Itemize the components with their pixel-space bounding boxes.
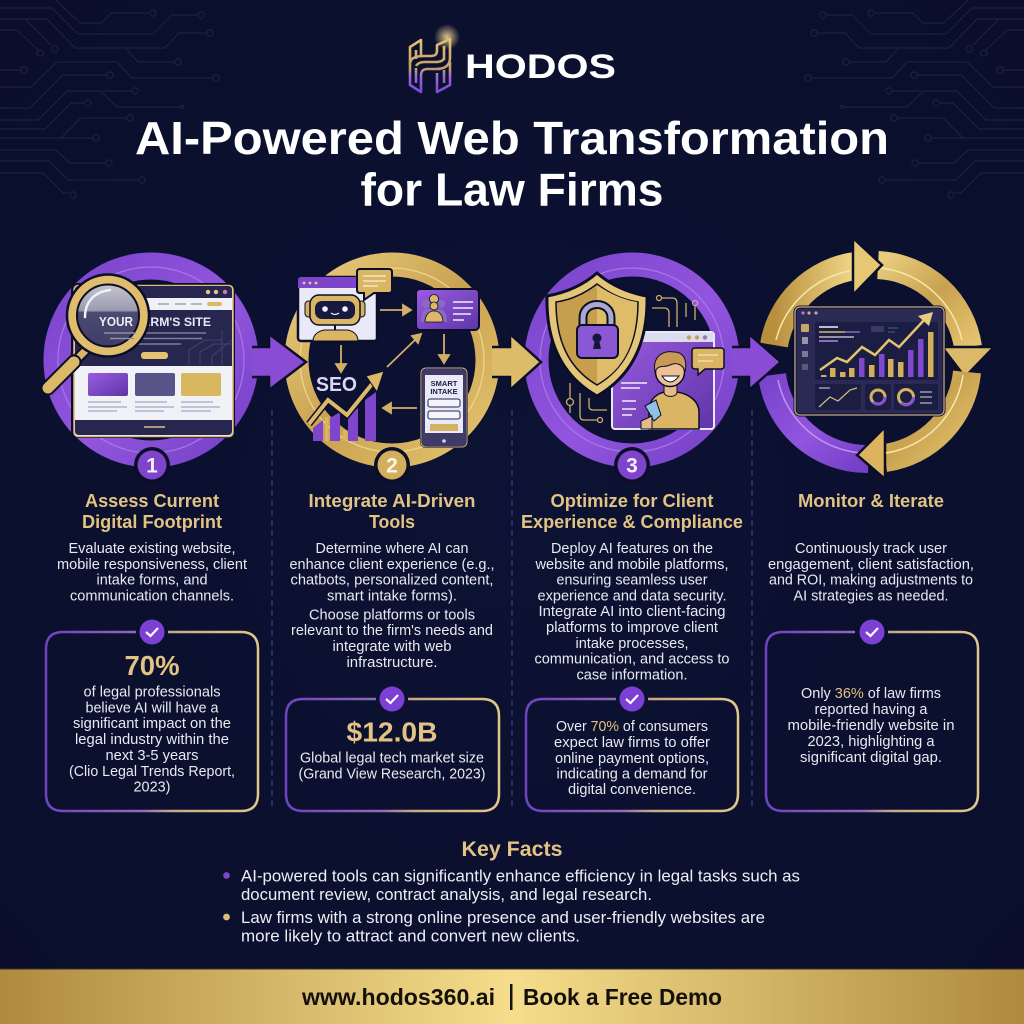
- dashed column dividers: [272, 410, 752, 806]
- column 3: description: communication, and access to: [534, 652, 730, 668]
- column 4: stat panel: Only 36% of law firms: [801, 686, 941, 702]
- icon: audience card: [416, 289, 479, 330]
- number badge 1: 1: [146, 454, 158, 478]
- column 4: description: [768, 541, 974, 604]
- step 3 illustration: security and client experience: [536, 264, 728, 456]
- arrow: step 1 to step 2: [252, 334, 306, 390]
- column 3: stat panel: digital convenience.: [568, 782, 696, 798]
- column 4: stat panel: mobile-friendly website in: [788, 718, 954, 734]
- column 2: heading: Integrate AI-Driven: [308, 491, 476, 511]
- column 1: heading: Digital Footprint: [82, 512, 222, 532]
- column 3: description: ensuring seamless user: [556, 573, 708, 589]
- icon: magnifying glass: [48, 274, 149, 388]
- key fact 2: Law firms with a strong online presence and user-friendly websites are: [241, 908, 765, 927]
- column 1: description: communication channels.: [70, 588, 234, 604]
- column 3: stat panel: Over 70% of consumers: [556, 719, 708, 735]
- arrow: step 3 to step 4: [732, 334, 781, 390]
- column 3: description: Deploy AI features on the: [551, 541, 713, 557]
- arrow: step 2 to step 3: [492, 334, 541, 390]
- column 1: heading: Assess Current: [85, 491, 219, 511]
- column 2: description: enhance client experience (e.g.,: [290, 557, 494, 573]
- column 3: description: experience and data security.: [538, 588, 726, 604]
- icon: SEO bar chart and rising arrow: [309, 371, 384, 441]
- column 3: description: Integrate AI into client-facing: [538, 604, 726, 620]
- column 2: stat panel: $12.0B: [346, 716, 438, 748]
- number badge 2: 2: [386, 454, 398, 478]
- title: for Law Firms: [360, 164, 664, 216]
- icon: website browser: [73, 285, 233, 436]
- column 1: stat panel: legal industry within the: [75, 732, 229, 748]
- column 2: stat panel: [286, 686, 499, 811]
- icon: SEO bar chart and rising arrow: SEO: [316, 374, 357, 396]
- column 1: stat panel: (Clio Legal Trends Report,: [69, 764, 235, 780]
- column 1: stat panel: 2023): [134, 780, 170, 796]
- column 4: stat panel: [766, 620, 978, 811]
- logo: HODOS: HODOS: [465, 48, 616, 86]
- column 3: stat panel: online payment options,: [555, 751, 709, 767]
- footer banner: www.hodos360.ai: [301, 984, 495, 1010]
- step 2 illustration: AI tools workflow: [296, 264, 488, 456]
- column 2: description: smart intake forms).: [327, 588, 457, 604]
- column 1: description: mobile responsiveness, client: [57, 557, 247, 573]
- column 2: description: relevant to the firm's needs and: [291, 623, 493, 639]
- column 1: stat panel: next 3-5 years: [106, 748, 198, 764]
- footer banner: Book a Free Demo: [523, 984, 722, 1010]
- icon: magnifying glass: YOUR: [99, 315, 133, 329]
- title: [135, 112, 889, 216]
- column 1: description: Evaluate existing website,: [68, 541, 236, 557]
- column 2: heading: [308, 491, 476, 532]
- column 4: description: AI strategies as needed.: [794, 588, 948, 604]
- column 1: description: [57, 541, 247, 604]
- column 4: stat panel: significant digital gap.: [800, 750, 942, 766]
- column 3: heading: Optimize for Client: [550, 491, 714, 511]
- footer banner: [0, 969, 1024, 1024]
- column 4: description: engagement, client satisfaction,: [768, 557, 974, 573]
- column 3: stat panel: indicating a demand for: [556, 766, 708, 782]
- column 4: stat panel: reported having a: [814, 702, 928, 718]
- column 4: stat panel: 2023, highlighting a: [808, 734, 935, 750]
- key fact 2: [223, 908, 765, 946]
- column 3: stat panel: expect law firms to offer: [554, 735, 710, 751]
- key fact 1: AI-powered tools can significantly enhance efficiency in legal tasks such as: [241, 866, 800, 886]
- column 3: description: [534, 541, 730, 683]
- column 1: description: intake forms, and: [96, 573, 208, 589]
- title: AI-Powered Web Transformation: [135, 112, 889, 164]
- column 1: stat panel: significant impact on the: [73, 716, 231, 732]
- column 1: stat panel: [46, 620, 258, 811]
- column 1: stat panel: of legal professionals: [84, 684, 220, 700]
- column 3: description: website and mobile platforms,: [535, 557, 728, 573]
- logo: HODOS: [410, 24, 616, 92]
- column 2: heading: Tools: [369, 512, 415, 532]
- key fact 2: more likely to attract and convert new clients.: [241, 926, 580, 946]
- number badge 3: [614, 447, 650, 483]
- workflow arrows: [336, 305, 449, 413]
- column 2: description: integrate with web: [332, 639, 452, 655]
- column 2: description: Choose platforms or tools: [309, 607, 475, 623]
- key facts heading: Key Facts: [462, 838, 562, 861]
- key fact 1: [223, 866, 800, 904]
- column 3: heading: [521, 491, 743, 532]
- number badge 2: [374, 447, 410, 483]
- key fact 1: document review, contract analysis, and legal research.: [241, 885, 652, 904]
- circuit traces: [566, 296, 698, 422]
- number badge 3: 3: [626, 454, 638, 478]
- column 3: heading: Experience & Compliance: [521, 512, 743, 532]
- column 1: heading: [82, 491, 222, 532]
- column 2: description: Determine where AI can: [316, 541, 468, 557]
- column 1: stat panel: believe AI will have a: [86, 700, 219, 716]
- icon: smart intake phone: INTAKE: [430, 387, 458, 396]
- column 4: description: Continuously track user: [795, 541, 947, 557]
- icon: smart intake phone: [421, 368, 467, 447]
- column 2: description: infrastructure.: [346, 655, 438, 671]
- column 2: description: chatbots, personalized content,: [290, 573, 494, 589]
- column 1: stat panel: 70%: [124, 650, 180, 681]
- column 3: stat panel: [526, 686, 738, 811]
- column 3: description: intake processes,: [576, 636, 688, 652]
- column 4: description: and ROI, making adjustments to: [769, 573, 973, 589]
- step 1 illustration: website under magnifying glass: [48, 266, 245, 454]
- icon: client browser window: [612, 332, 724, 429]
- column 3: description: platforms to improve client: [546, 620, 718, 636]
- step 4 illustration: iteration cycle with dashboard: [772, 238, 994, 479]
- icon: analytics dashboard: [795, 307, 944, 415]
- icon: website browser: IRM'S SITE: [147, 317, 211, 329]
- column 2: description: [290, 541, 494, 671]
- column 4: heading: Monitor & Iterate: [798, 491, 944, 511]
- icon: chatbot window: [298, 269, 392, 341]
- column 2: stat panel: Global legal tech market size: [300, 751, 484, 767]
- number badge 1: [134, 447, 170, 483]
- column 3: description: case information.: [576, 667, 688, 683]
- column 2: stat panel: (Grand View Research, 2023): [298, 767, 486, 783]
- icon: shield with padlock: [547, 273, 647, 396]
- icon: smart intake phone: SMART: [431, 379, 458, 388]
